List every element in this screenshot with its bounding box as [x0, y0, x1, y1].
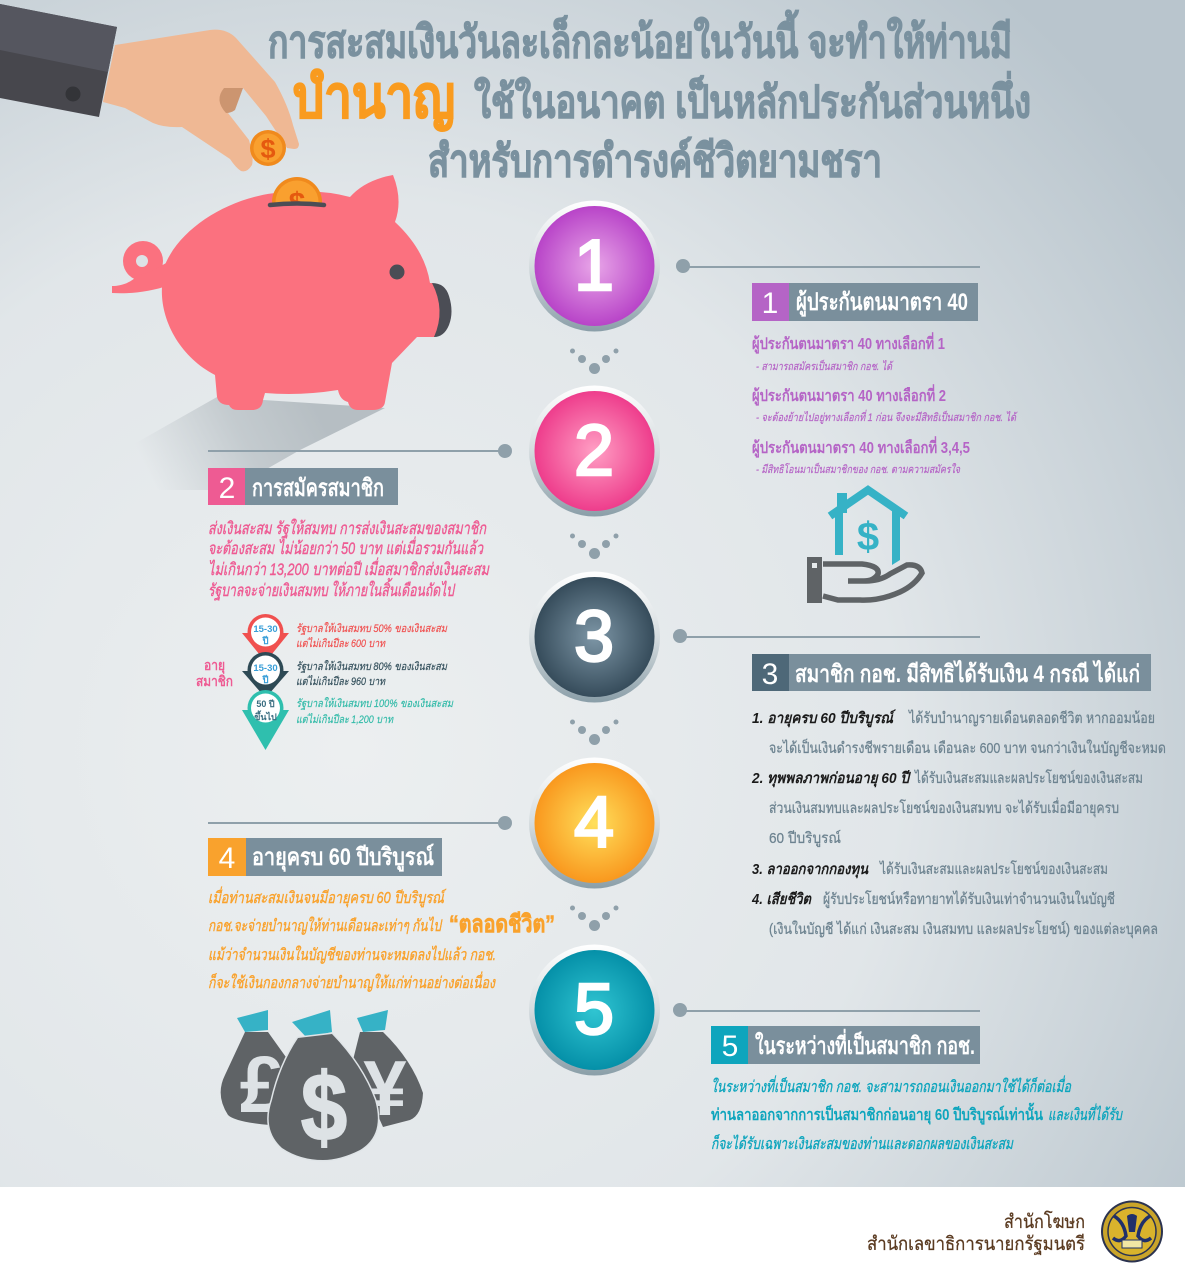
- section 3 list: 60 ปีบริบูรณ์: [769, 830, 841, 847]
- section 4 body: ก็จะใช้เงินกองกลางจ่ายบำนาญให้แก่ท่านอย่างต่อเนื่อง: [208, 971, 496, 992]
- section 3 list: ผู้รับประโยชน์หรือทายาทได้รับเงินเท่าจำนวนเงินในบัญชี: [823, 890, 1115, 908]
- section 3 list: 4. เสียชีวิต: [751, 891, 812, 908]
- illustration: hand dropping coin: $: [260, 134, 276, 164]
- title: บำนาญ: [293, 65, 455, 131]
- icon: money bags: [221, 1010, 423, 1161]
- footer: issuing office: [867, 1210, 1085, 1255]
- section 5 body: ก็จะได้รับเฉพาะเงินสะสมของท่านและดอกผลของเงินสะสม: [711, 1134, 1014, 1153]
- section 1 header: 1: [762, 287, 778, 320]
- section 2 body: [208, 518, 490, 601]
- panel: section 3: [751, 654, 1166, 939]
- section 3 list: ได้รับเงินสะสมและผลประโยชน์ของเงินสะสม: [879, 860, 1108, 878]
- section 1 options: [752, 332, 1018, 476]
- age markers: 15-30: [253, 624, 278, 635]
- section 3 list: ส่วนเงินสมทบและผลประโยชน์ของเงินสมทบ จะได้รับเมื่อมีอายุครบ: [769, 797, 1119, 818]
- age markers: [242, 614, 289, 750]
- leader lines: [208, 259, 980, 1017]
- illustration: hand dropping coin: [0, 4, 299, 171]
- subsidy rates: รัฐบาลให้เงินสมทบ 80% ของเงินสะสม: [296, 660, 448, 673]
- age markers: 15-30: [253, 663, 278, 674]
- section 5 body: ท่านลาออกจากการเป็นสมาชิกก่อนอายุ 60 ปีบริบูรณ์เท่านั้น: [711, 1102, 1043, 1126]
- section 3 header: 3: [762, 658, 778, 691]
- section 4 body: “ตลอดชีวิต”: [449, 911, 555, 938]
- section 1 options: ผู้ประกันตนมาตรา 40 ทางเลือกที่ 1: [752, 332, 945, 355]
- section 2 body: ไม่เกินกว่า 13,200 บาทต่อปี เมื่อสมาชิกส่งเงินสะสม: [208, 557, 490, 579]
- section 1 options: - จะต้องย้ายไปอยู่ทางเลือกที่ 1 ก่อน จึงจะมีสิทธิเป็นสมาชิก กอช. ได้: [756, 409, 1018, 424]
- section 4 header: อายุครบ 60 ปีบริบูรณ์: [252, 843, 434, 873]
- section 2 header: 2: [219, 472, 235, 505]
- step circle 1: [529, 200, 660, 332]
- section 3 list: [751, 709, 1166, 939]
- icon: government seal: [1101, 1200, 1163, 1262]
- icon: money bags: ¥: [363, 1044, 407, 1132]
- age markers: ปี: [262, 635, 269, 647]
- section 5 header: 5: [722, 1030, 738, 1063]
- step circle 2: [529, 386, 660, 516]
- illustration: piggy bank: [112, 175, 452, 490]
- panel: section 2: [196, 468, 490, 750]
- icon: money bags: £: [240, 1040, 284, 1129]
- step circle 4: 4: [574, 783, 614, 863]
- icon: house on hand: $: [857, 515, 879, 559]
- section 5 body: ในระหว่างที่เป็นสมาชิก กอช. จะสามารถถอนเงินออกมาใช้ได้ก็ต่อเมื่อ: [711, 1075, 1072, 1096]
- section 5 header: [711, 1026, 980, 1064]
- age markers: ปี: [262, 674, 269, 686]
- panel: section 4: [208, 838, 555, 1161]
- step circle 2: 2: [574, 411, 614, 491]
- age markers: ขึ้นไป: [254, 710, 277, 722]
- member age label: [196, 657, 233, 689]
- section 2 header: การสมัครสมาชิก: [252, 475, 384, 502]
- title: ใช้ในอนาคต เป็นหลักประกันส่วนหนึ่ง: [474, 71, 1031, 127]
- section 1 options: ผู้ประกันตนมาตรา 40 ทางเลือกที่ 2: [752, 384, 946, 407]
- icon: money bags: $: [301, 1054, 347, 1161]
- section 1 header: ผู้ประกันตนมาตรา 40: [796, 289, 968, 317]
- section 1 options: ผู้ประกันตนมาตรา 40 ทางเลือกที่ 3,4,5: [752, 436, 970, 459]
- section 1 options: - สามารถสมัครเป็นสมาชิก กอช. ได้: [756, 359, 894, 373]
- section 4 body: แม้ว่าจำนวนเงินในบัญชีของท่านจะหมดลงไปแล้ว กอช.: [208, 945, 496, 964]
- subsidy rates: แต่ไม่เกินปีละ 960 บาท: [296, 675, 386, 688]
- subsidy rates: แต่ไม่เกินปีละ 600 บาท: [296, 637, 386, 650]
- section 3 list: 3. ลาออกจากกองทุน: [752, 861, 869, 879]
- step circle 3: [529, 572, 660, 702]
- step circle 3: 3: [574, 597, 614, 677]
- section 2 body: จะต้องสะสม ไม่น้อยกว่า 50 บาท แต่เมื่อรวมกันแล้ว: [208, 536, 484, 558]
- footer: issuing office: สำนักโฆษก: [1004, 1210, 1085, 1233]
- illustration: piggy bank: $: [289, 187, 306, 220]
- subsidy rates: [296, 622, 454, 726]
- section 4 header: 4: [219, 842, 235, 875]
- section 1 header: [752, 283, 978, 321]
- step circle 4: [529, 758, 660, 888]
- footer: issuing office: สำนักเลขาธิการนายกรัฐมนตรี: [867, 1233, 1085, 1255]
- section 2 body: รัฐบาลจะจ่ายเงินสมทบ ให้ภายในสิ้นเดือนถัดไป: [208, 577, 456, 601]
- step circle 5: [529, 944, 660, 1076]
- section 3 header: [752, 654, 1151, 691]
- section 3 list: 1. อายุครบ 60 ปีบริบูรณ์: [752, 709, 897, 728]
- section 5 body: และเงินที่ได้รับ: [1048, 1103, 1123, 1124]
- section 1 options: - มีสิทธิโอนมาเป็นสมาชิกของ กอช. ตามความสมัครใจ: [756, 462, 960, 476]
- subsidy rates: แต่ไม่เกินปีละ 1,200 บาท: [296, 713, 394, 726]
- member age label: อายุ: [204, 657, 225, 674]
- subsidy rates: รัฐบาลให้เงินสมทบ 100% ของเงินสะสม: [296, 697, 454, 710]
- member age label: สมาชิก: [196, 673, 233, 689]
- connector dots between circles: [570, 348, 618, 931]
- age markers: 50 ปี: [256, 699, 275, 709]
- section 4 body: [208, 886, 555, 992]
- panel: section 5: [711, 1026, 1123, 1153]
- section 2 body: ส่งเงินสะสม รัฐให้สมทบ การส่งเงินสะสมของสมาชิก: [208, 518, 487, 539]
- section 4 body: เมื่อท่านสะสมเงินจนมีอายุครบ 60 ปีบริบูรณ์: [208, 886, 446, 908]
- icon: house on hand: [807, 490, 922, 603]
- subsidy rates: รัฐบาลให้เงินสมทบ 50% ของเงินสะสม: [296, 622, 448, 635]
- section 3 list: 2. ทุพพลภาพก่อนอายุ 60 ปี: [751, 770, 911, 788]
- panel: section 1: [752, 283, 1018, 603]
- section 2 header: [208, 468, 398, 505]
- step circle 1: 1: [574, 226, 614, 306]
- section 5 body: [711, 1075, 1123, 1153]
- section 4 body: กอช.จะจ่ายบำนาญให้ท่านเดือนละเท่าๆ กันไป: [208, 916, 443, 935]
- title: สำหรับการดำรงค์ชีวิตยามชรา: [428, 136, 882, 186]
- section 4 header: [208, 838, 442, 876]
- title: [268, 9, 1031, 186]
- step circle 5: 5: [574, 970, 614, 1050]
- section 5 header: ในระหว่างที่เป็นสมาชิก กอช.: [755, 1028, 975, 1060]
